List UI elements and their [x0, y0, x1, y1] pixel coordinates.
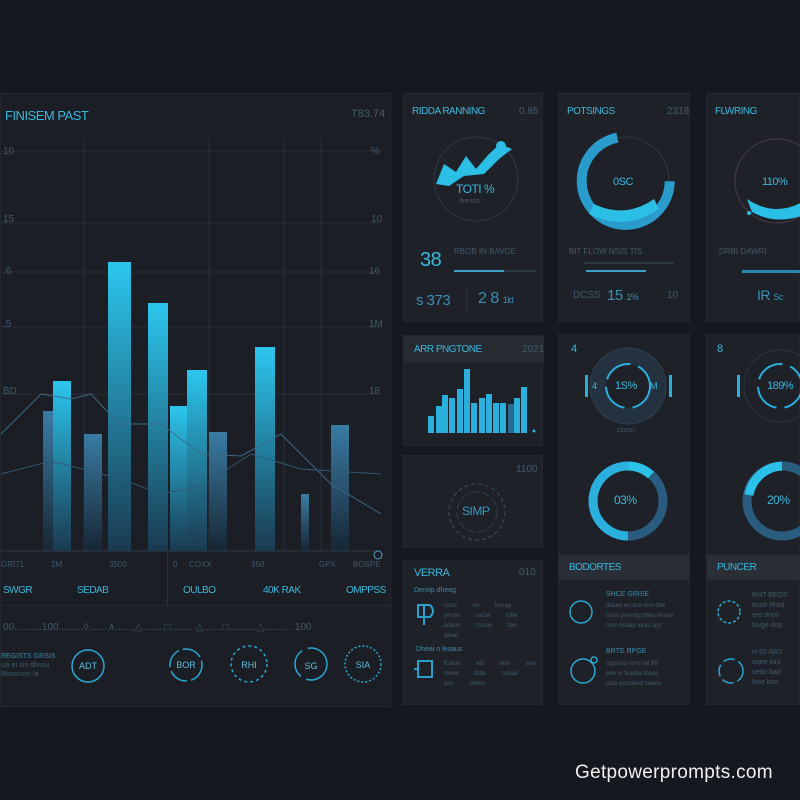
panel: potsings: POTSINGS [567, 106, 615, 117]
panel: flwring: IR Sc [757, 287, 783, 303]
panel: gauges column 1: cida ecodaled cabea [606, 681, 661, 687]
panel: potsings: DCSS [573, 290, 601, 301]
panel: gauges column 2: RHT BEOS [752, 592, 788, 599]
panel: potsings: 15 1% [607, 287, 638, 304]
panel: flwring: FLWRING [715, 106, 757, 117]
panel: ridda ranking: 38 [420, 249, 441, 271]
panel: main chart: 16 [369, 266, 380, 277]
label row: SEDAB [77, 585, 108, 596]
panel: bar mini chart [403, 335, 543, 446]
panel: flwring: DRBI DAWRI [719, 247, 767, 256]
panel: ridda ranking: RIDDA RANNING [412, 106, 485, 117]
panel: stamp gauge: 1100 [516, 464, 538, 475]
panel: gauges column 2: 189% [767, 380, 793, 392]
panel: potsings: 0SC [613, 176, 633, 188]
label row: OMPPSS [346, 585, 386, 596]
panel: ridda ranking: TOTI % [456, 182, 494, 196]
panel: gauges column 2: H 60 ABS [752, 649, 782, 656]
x axis labels: 2M [51, 560, 62, 569]
panel: gauges column 1: ccccn [617, 427, 635, 434]
panel: stamp gauge [403, 455, 543, 548]
panel: gauges column 2: sedo bad [752, 669, 781, 676]
x axis labels: GRI71 [1, 560, 24, 569]
title: FINISEM PAST [5, 108, 88, 123]
panel: gauges column 1: SHCE GRISE [606, 591, 649, 598]
panel: gauges column 1: 4 [571, 343, 577, 355]
panel: main chart [0, 93, 391, 707]
x axis labels: BOSPE [353, 560, 381, 569]
panel: gauges column 1: trsov pnendg bbso ehone [606, 613, 674, 619]
panel: verra: Dheai o lesaus [416, 646, 462, 653]
x axis labels [1, 560, 381, 569]
panel: gauges column 2: 20% [767, 493, 790, 507]
panel: main chart: .6 [3, 266, 11, 277]
icon row: SIA [356, 660, 370, 670]
panel: gauges column 2: lovge dop [752, 622, 782, 629]
panel: bar mini chart: 2021 [522, 344, 544, 355]
panel: gauges column 1: eoe sr fuadse loeas [606, 671, 658, 677]
watermark: Getpowerprompts.com [575, 762, 773, 783]
panel: gauges column 1: M [650, 381, 657, 391]
panel: ridda ranking: 0.85 [519, 106, 538, 117]
panel: potsings [558, 93, 690, 322]
panel: flwring [706, 93, 800, 322]
axis labels: 10 [3, 146, 14, 157]
panel: gauges column 2: ere dnon [752, 612, 780, 619]
panel: flwring: 110% [762, 176, 787, 188]
panel: gauges column 1: daceo eo dse ooe dbe [606, 603, 665, 609]
x axis labels: GPX [319, 560, 336, 569]
panel: main chart: 18 [369, 386, 380, 397]
panel: gauges column 1: olgsocd nom tail 88 [606, 661, 658, 667]
panel: gauges column 2: eose ehsd [752, 602, 784, 609]
panel: potsings: 2318 [667, 106, 689, 117]
x axis labels: 350 [251, 560, 264, 569]
panel: gauges column 1 [558, 334, 690, 705]
panel: main chart: % [371, 146, 380, 157]
panel: main chart: 15 [3, 214, 14, 225]
panel: gauges column 2: lese bao [752, 679, 778, 686]
panel: stamp gauge: SIMP [462, 504, 489, 518]
panel: gauges column 2 [706, 334, 800, 705]
label row: SWGR [3, 585, 32, 596]
x axis labels: COXX [189, 560, 212, 569]
panel: gauges column 1: 03% [614, 493, 637, 507]
panel: verra [403, 560, 543, 705]
panel: ridda ranking: s 373 [416, 292, 450, 309]
icon row: REGISTS GRSIS [1, 653, 55, 660]
icon row: 00..........100.........◊.......∧.......△........□.........△.......□..........△.......... 100 [3, 622, 312, 633]
icon row [1, 622, 382, 683]
panel: verra: VERRA [414, 567, 449, 579]
panel: gauges column 1: BODORTES [569, 562, 621, 573]
panel: ridda ranking: RBOB IN BAVOE [454, 247, 516, 256]
x axis labels: 0 [173, 560, 177, 569]
label row: 40K RAK [263, 585, 301, 596]
panel: gauges column 1: tnon osdap leras spc [606, 623, 661, 629]
icon row: ADT [79, 661, 98, 671]
panel: main chart: BD [3, 386, 17, 397]
panel: gauges column 2: oqee lonl [752, 659, 780, 666]
icon row: RHI [241, 660, 257, 670]
panel: main chart: T83.74 [351, 108, 385, 120]
icon row: Bbacrnnn la [1, 671, 38, 678]
panel: main chart: 10 [371, 214, 382, 225]
panel: main chart: 1M [369, 319, 383, 330]
panel: gauges column 2: PUNCER [717, 562, 756, 573]
panel: gauges column 1: 1S% [615, 380, 637, 392]
panel: gauges column 1: BRTE RPGE [606, 648, 646, 655]
panel: ridda ranking [403, 93, 543, 322]
panel: ridda ranking: 2 8 1ld [478, 290, 513, 307]
panel: verra: 010 [519, 567, 536, 578]
panel: main chart: .5 [3, 319, 11, 330]
bar chart [1, 139, 382, 560]
icon row: SG [304, 661, 318, 671]
panel: verra: Deroip dheeg [414, 587, 456, 594]
panel: verra: caco ou ircnag prnda saclia ldhe adeos rcvioe fae alwal [444, 603, 517, 639]
panel: bar mini chart: ARR PNGTONE [414, 344, 482, 355]
panel: verra: Ealcei ebl bod sea oloee ttdar oqsali asn oldieo [444, 661, 535, 687]
panel: gauges column 2: 8 [717, 343, 723, 355]
label row [1, 551, 392, 606]
icon row: uiii et sin dbsou [1, 662, 49, 669]
panel: gauges column 1: 4 [592, 381, 597, 391]
icon row: BOR [176, 660, 196, 670]
panel: potsings: BIT FLOW NSIS TIS [569, 247, 642, 256]
x axis labels: 3500 [109, 560, 127, 569]
panel: potsings: 10 [667, 290, 678, 301]
panel: ridda ranking: ihenos [459, 198, 480, 205]
label row: OULBO [183, 585, 216, 596]
